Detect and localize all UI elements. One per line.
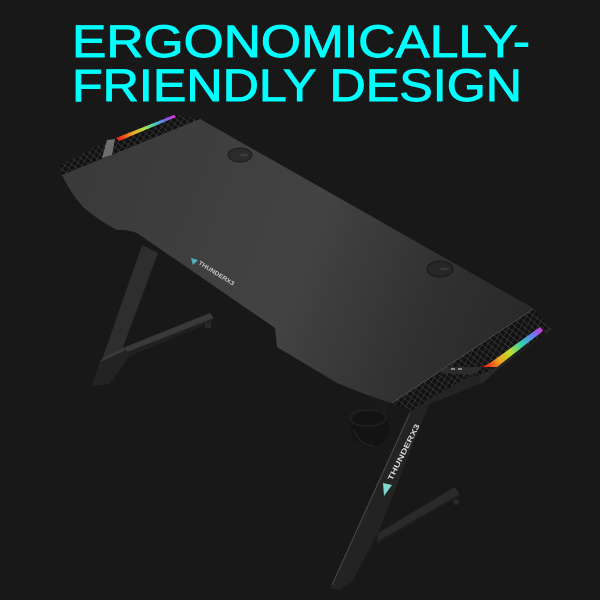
left foot arm [125, 313, 214, 354]
desktop surface [62, 119, 533, 403]
left foot peg [205, 323, 211, 328]
right leg [330, 402, 460, 590]
right foot arm [377, 487, 460, 543]
title [72, 16, 530, 111]
right foot peg [453, 499, 459, 505]
grommet right [427, 261, 453, 277]
left mesh wing [60, 114, 202, 176]
right lower frame [478, 327, 552, 384]
desktop brand text: THUNDERX3 [197, 261, 236, 288]
desktop logo mark [191, 258, 198, 265]
left foot base [92, 349, 130, 386]
left leg [92, 245, 214, 386]
cup holder and hook [350, 397, 390, 447]
left rgb strip [116, 115, 176, 141]
right leg brand text: THUNDERX3 [386, 422, 422, 482]
title: FRIENDLY DESIGN [72, 60, 522, 111]
left gray panel [102, 139, 115, 158]
right control panel [440, 367, 484, 375]
grommet left [228, 148, 252, 162]
title: ERGONOMICALLY- [72, 16, 530, 67]
right mesh wing [390, 308, 552, 411]
right rgb strip [482, 327, 543, 367]
right leg logo mark [383, 483, 392, 496]
